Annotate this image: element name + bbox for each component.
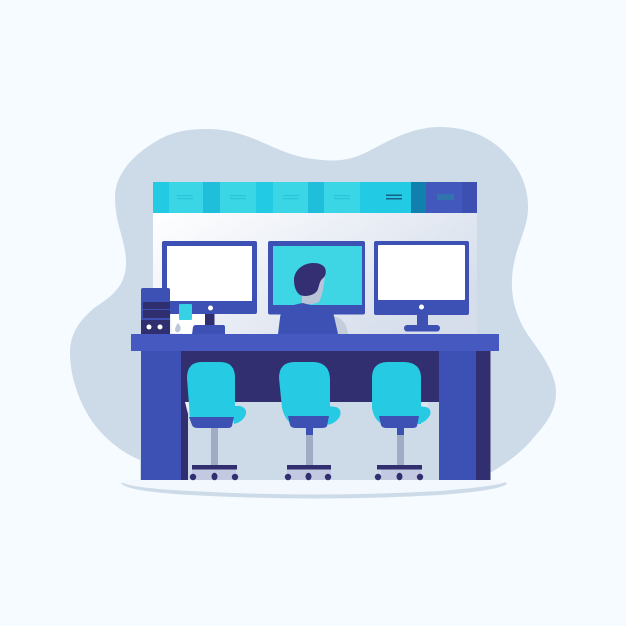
mug and paper	[171, 304, 205, 334]
floor ellipse	[121, 480, 507, 498]
chair 2	[279, 362, 340, 480]
desk top	[131, 334, 499, 351]
center monitor	[268, 241, 365, 314]
computer tower	[141, 288, 170, 334]
left monitor	[162, 241, 257, 334]
chair 1	[187, 362, 246, 480]
person	[278, 263, 348, 334]
desk legs and back panel	[141, 351, 490, 480]
wall panel	[153, 213, 477, 334]
background blob	[70, 127, 556, 481]
chair 3	[372, 362, 430, 480]
top banner	[153, 182, 477, 213]
right monitor	[374, 241, 469, 332]
